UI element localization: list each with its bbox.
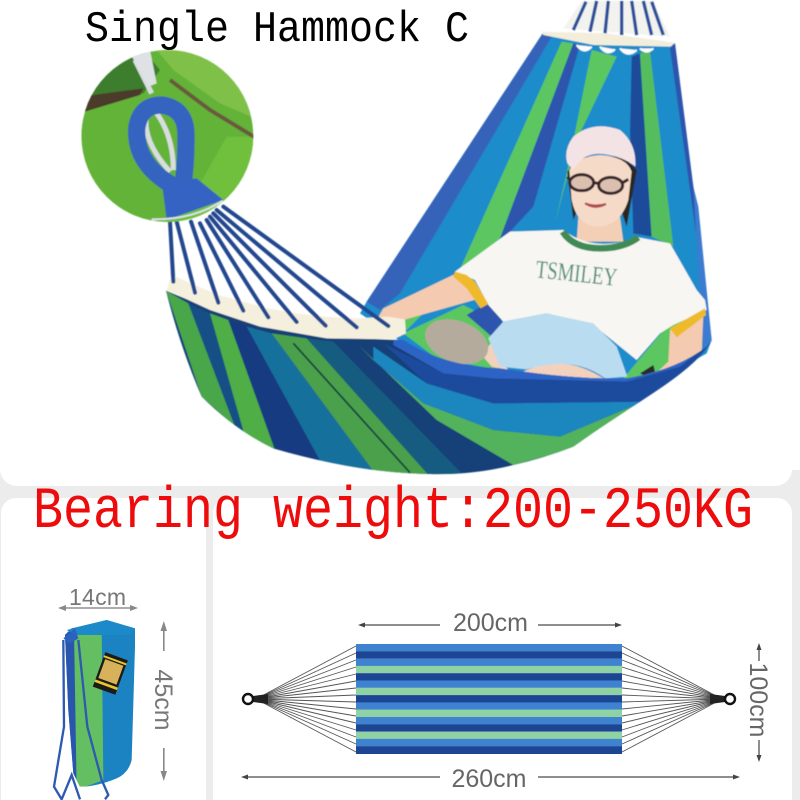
rope knot [162, 178, 223, 220]
bag drawstrings [54, 640, 108, 799]
back fabric of hammock [360, 33, 712, 382]
panel: hammock dimensions [241, 609, 772, 793]
45cm height label: 45cm [149, 669, 177, 731]
thighs [520, 363, 608, 382]
spreader bar [167, 275, 406, 339]
collar [563, 232, 638, 248]
right arm [657, 315, 703, 373]
100cm label: 100cm [744, 662, 772, 738]
rope loop [137, 105, 186, 185]
hammock cloth diagram [356, 644, 622, 754]
phone [640, 365, 655, 375]
title: Single Hammock C [85, 5, 469, 55]
14cm width label: 14cm [69, 584, 126, 610]
suspension ropes [170, 207, 388, 327]
cap [566, 126, 635, 170]
stripe: blue rim [393, 337, 713, 382]
left spreader bar, ropes and detail circle [77, 50, 406, 339]
shirt text: TSMILEY [534, 255, 619, 292]
left arm [377, 272, 480, 320]
face [569, 155, 632, 227]
neck [577, 217, 623, 242]
front fabric of hammock [165, 290, 711, 475]
right suspension lines and ring [622, 646, 735, 752]
hair [567, 157, 637, 227]
stripe: green band [357, 343, 643, 465]
bag tag [93, 652, 128, 695]
panel: storage bag [54, 584, 177, 799]
circle rim [152, 201, 223, 219]
bag illustration [54, 617, 140, 799]
detail circle: rope loop and carabiner [77, 50, 267, 223]
t-shirt [455, 230, 707, 360]
shorts [488, 313, 627, 378]
smile [585, 203, 606, 207]
200cm arrows [358, 622, 622, 628]
260cm label: 260cm [451, 765, 527, 793]
stripe: navy band [383, 342, 712, 403]
14cm width arrow [58, 605, 138, 611]
stripe: teal band [373, 347, 643, 437]
inner fabric near seat [403, 305, 500, 370]
glasses [567, 175, 628, 193]
45cm height arrow [160, 621, 167, 781]
200cm label: 200cm [453, 609, 528, 637]
hammock photo [77, 1, 727, 480]
100cm arrows [756, 643, 762, 762]
carabiner [135, 60, 173, 172]
shoe sole [419, 311, 494, 372]
260cm arrows [241, 774, 740, 780]
sleeve cuffs [453, 272, 488, 308]
top spreader bar and ropes [542, 1, 675, 54]
left suspension lines and ring [243, 646, 356, 752]
person in hammock [377, 126, 707, 382]
